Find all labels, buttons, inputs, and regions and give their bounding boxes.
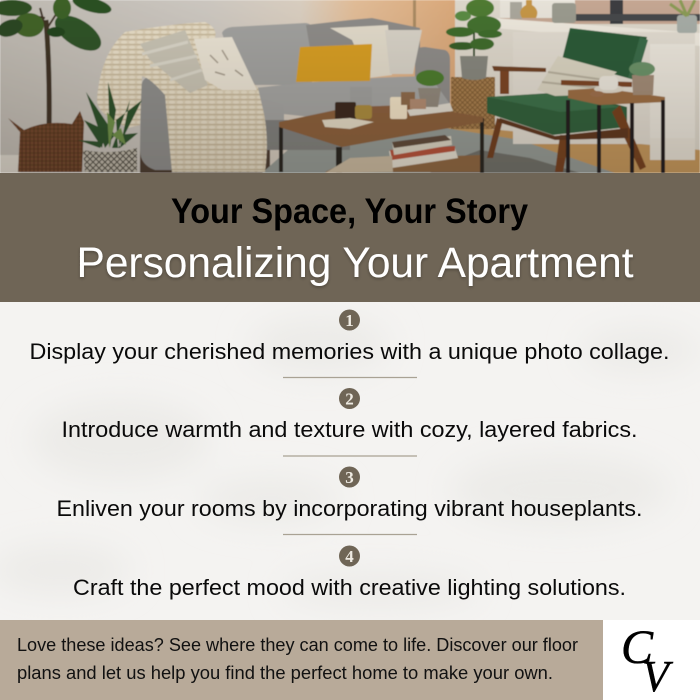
footer call to action xyxy=(0,620,603,700)
panel: tips xyxy=(0,302,700,620)
side table with cup and succulent xyxy=(566,62,665,173)
tip 4: Craft the perfect mood with creative lighting solutions. xyxy=(73,575,626,600)
tip 2 xyxy=(62,388,638,442)
tip 4 xyxy=(73,546,626,600)
floor and rug xyxy=(140,125,700,173)
fiddle leaf tree in basket xyxy=(0,0,113,172)
tip 1 xyxy=(30,310,670,364)
dividers xyxy=(283,378,417,534)
sofa xyxy=(140,18,450,170)
plant on wicker stand xyxy=(446,0,502,129)
heading: Your Space, Your Story: Your Space, Your Story xyxy=(171,192,528,231)
logo: CV monogram: C xyxy=(621,621,654,674)
coffee table with books and candles xyxy=(279,70,484,173)
photo: living room scene xyxy=(0,0,700,173)
window and sill xyxy=(494,0,700,160)
tip 3 xyxy=(56,466,642,521)
knit blanket xyxy=(97,22,267,172)
snake plant in patterned pot xyxy=(78,82,142,172)
tip 1: Display your cherished memories with a unique photo collage. xyxy=(30,339,670,364)
green armchair xyxy=(487,28,648,172)
logo: CV monogram xyxy=(603,620,700,700)
tip 1: 1 xyxy=(345,311,354,330)
subheading: Personalizing Your Apartment: Personalizing Your Apartment xyxy=(76,239,634,287)
footer call to action: plans and let us help you find the perfect home to make your own. xyxy=(17,663,553,683)
title band xyxy=(0,173,700,302)
tip 3: 3 xyxy=(345,468,354,487)
tip 2: Introduce warmth and texture with cozy, layered fabrics. xyxy=(62,417,638,442)
logo: CV monogram: V xyxy=(642,652,674,700)
footer call to action: Love these ideas? See where they can come to life. Discover our floor xyxy=(17,635,578,655)
tip 2: 2 xyxy=(345,390,354,408)
tip 3: Enliven your rooms by incorporating vibrant houseplants. xyxy=(56,496,642,521)
pillows xyxy=(140,25,422,93)
tip 4: 4 xyxy=(345,547,354,566)
